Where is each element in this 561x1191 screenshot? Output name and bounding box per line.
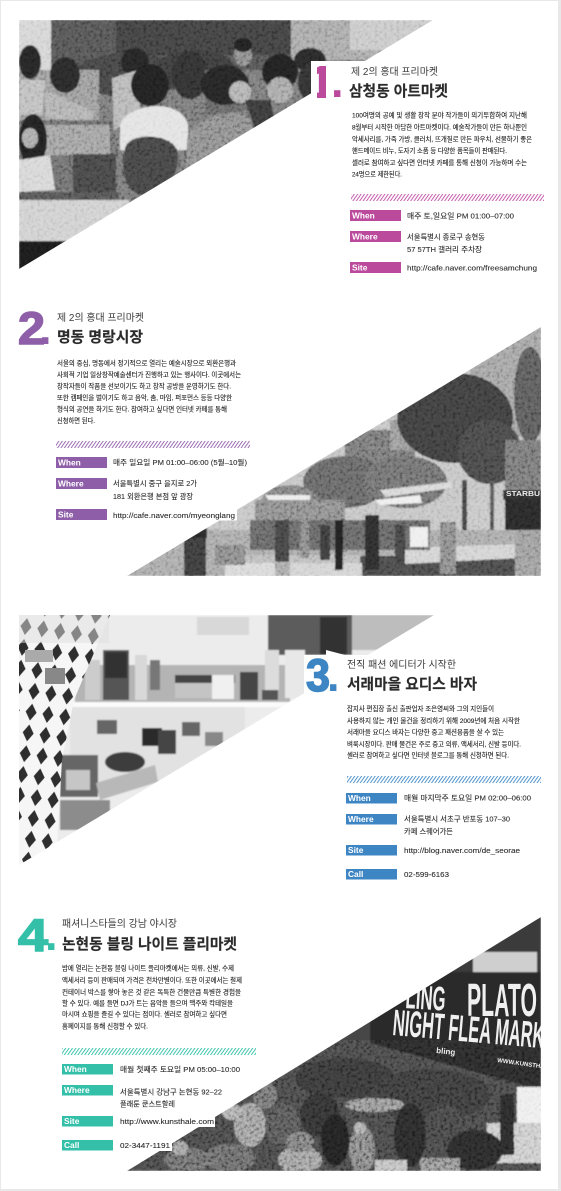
when bbox=[346, 792, 531, 804]
when bbox=[56, 457, 247, 468]
number 4: . bbox=[45, 909, 58, 960]
panel: section 3 Seorae village Yodis bazaar bbox=[19, 615, 541, 880]
description bbox=[352, 110, 532, 178]
subtitle: 패셔니스타들의 강남 야시장 bbox=[62, 918, 177, 930]
site: Site bbox=[348, 845, 364, 855]
number 3: 3 bbox=[306, 650, 330, 701]
call: Call bbox=[348, 869, 363, 879]
description: 셀러로 참여하고 싶다면 인터넷 블로그를 통해 신청하면 된다. bbox=[347, 750, 509, 760]
number 4: 4 bbox=[18, 910, 48, 961]
when: 매주 토,일요일 PM 01:00–07:00 bbox=[407, 212, 514, 220]
hatch divider bbox=[347, 776, 541, 783]
white header patch bbox=[311, 61, 436, 101]
panel: section 4 Nonhyeon-dong Bling night flea market bbox=[18, 909, 552, 1174]
subtitle: 제 2의 홍대 프리마켓 bbox=[57, 311, 144, 324]
info table bbox=[56, 457, 247, 520]
number 1 bbox=[317, 66, 340, 98]
info table bbox=[350, 210, 537, 273]
description: 마시며 쇼핑을 즐길 수 있다는 점이다. 셀러로 참여하고 싶다면 bbox=[62, 1009, 227, 1018]
banner lettering: WWW.KUNSTHALE bbox=[497, 1058, 552, 1072]
where: 서울특별시 강남구 논현동 92–22 bbox=[120, 1086, 222, 1096]
description: 8월부터 시작한 아담한 아트마켓이다. 예술작가들이 만든 하나뿐인 bbox=[352, 122, 527, 132]
when bbox=[350, 210, 514, 221]
site bbox=[56, 509, 237, 520]
description bbox=[57, 359, 241, 425]
when: When bbox=[58, 458, 81, 468]
description: 사회적 기업 일상창작예술센터가 진행하고 있는 행사이다. 이곳에서는 bbox=[57, 370, 241, 379]
description: 24명으로 제한된다. bbox=[352, 170, 402, 178]
site: http://cafe.naver.com/freesamchung bbox=[407, 264, 537, 272]
title: 삼청동 아트마켓 bbox=[349, 83, 448, 100]
when: 매월 마지막주 토요일 PM 02:00–06:00 bbox=[404, 792, 531, 802]
where: Where bbox=[348, 814, 374, 824]
where bbox=[56, 478, 197, 501]
site: http://www.kunsthale.com bbox=[120, 1117, 214, 1126]
site: Site bbox=[64, 1116, 80, 1126]
call bbox=[346, 869, 449, 880]
where: Where bbox=[352, 232, 378, 242]
photo: night flea market crowd under banner bbox=[127, 917, 552, 1174]
number 2: . bbox=[39, 303, 52, 354]
title: 서래마을 요디스 바자 bbox=[347, 676, 477, 693]
hatch divider bbox=[56, 441, 250, 448]
description: 할 수 있다. 예를 들면 DJ가 트는 음악을 들으며 맥주와 칵테일을 bbox=[62, 998, 233, 1007]
where bbox=[350, 231, 485, 254]
site: http://blog.naver.com/de_seorae bbox=[404, 846, 520, 855]
subtitle: 전직 패션 에디터가 시작한 bbox=[347, 659, 456, 671]
description: 서래마을 요디스 바자는 다양한 중고 패션용품을 살 수 있는 bbox=[347, 728, 504, 736]
description: 사용하지 않는 개인 물건을 정리하기 위해 2009년에 처음 시작한 bbox=[347, 716, 520, 725]
site bbox=[350, 262, 537, 273]
number 1: 1 bbox=[306, 57, 339, 108]
call: 02-599-6163 bbox=[404, 870, 449, 879]
description: 악세사리를, 가죽 가방, 클러치, 뜨개질로 만든 파우치, 선물하기 좋은 bbox=[352, 134, 532, 144]
where: 플래툰 쿤스트할레 bbox=[120, 1100, 175, 1108]
where: 카페 스퀘어가든 bbox=[404, 826, 453, 836]
description: 또한 캠페인을 벌이기도 하고 음악, 춤, 마임, 퍼포먼스 등등 다양한 bbox=[57, 393, 232, 402]
number 1: . bbox=[331, 56, 344, 107]
banner lettering bbox=[393, 984, 541, 1068]
description: 신청하면 된다. bbox=[57, 416, 95, 425]
photo: plaza with trees bbox=[127, 327, 546, 576]
info table bbox=[346, 792, 531, 880]
site bbox=[62, 1116, 215, 1127]
description: 셀러로 참여하고 싶다면 인터넷 카페를 통해 신청이 가능하며 수는 bbox=[352, 158, 527, 167]
call bbox=[62, 1140, 172, 1151]
call: 02-3447-1191 bbox=[120, 1141, 170, 1150]
title: 논현동 블링 나이트 플리마켓 bbox=[62, 936, 237, 953]
site bbox=[346, 845, 520, 856]
description: 액세서리 등이 판매되며 가격은 천차만별이다. 또한 이곳에서는 철제 bbox=[62, 975, 242, 984]
where bbox=[346, 814, 510, 836]
panel: section 1 Samcheong-dong art market bbox=[19, 20, 544, 273]
description: 핸드메이드 비누, 도자기 소품 등 다양한 품목들이 판매된다. bbox=[352, 146, 507, 155]
where: 서울특별시 중구 을지로 2가 bbox=[113, 478, 197, 488]
description bbox=[347, 704, 521, 760]
white header patch bbox=[304, 650, 437, 700]
hatch divider bbox=[62, 1048, 256, 1055]
description: 100여명의 공예 및 생활 창작 분야 작가들이 의기투합하여 지난해 bbox=[352, 110, 527, 120]
number 4 bbox=[18, 909, 58, 961]
where: Where bbox=[64, 1085, 90, 1095]
description: 컨테이너 박스를 쌓아 놓은 것 같은 독특한 건물만큼 특별한 경험을 bbox=[62, 987, 241, 996]
call: Call bbox=[64, 1140, 79, 1150]
where: 서울특별시 서초구 반포동 107–30 bbox=[404, 814, 510, 824]
description bbox=[62, 963, 242, 1030]
description: 서울의 중심, 명동에서 정기적으로 열리는 예술시장으로 외환은행과 bbox=[57, 359, 236, 368]
when: 매주 일요일 PM 01:00–06:00 (5월–10월) bbox=[113, 457, 247, 467]
storefront sign: STARBU bbox=[506, 489, 540, 498]
where: 181 외환은행 본점 앞 광장 bbox=[113, 491, 193, 501]
subtitle: 제 2의 홍대 프리마켓 bbox=[351, 65, 438, 78]
number 3: . bbox=[327, 650, 340, 701]
banner lettering: LING bbox=[404, 978, 447, 1019]
when: When bbox=[348, 793, 371, 803]
where: Where bbox=[58, 478, 84, 488]
when bbox=[62, 1064, 240, 1074]
when: When bbox=[64, 1064, 87, 1074]
where bbox=[62, 1085, 222, 1108]
photo: shelves with vintage goods bbox=[19, 615, 434, 865]
photo: art market crowd bbox=[19, 20, 433, 271]
description: 홈페이지를 통해 신청할 수 있다. bbox=[62, 1021, 148, 1030]
info table bbox=[62, 1064, 240, 1151]
number 2: 2 bbox=[18, 303, 45, 354]
where: 서울특별시 종로구 송현동 bbox=[407, 232, 485, 242]
banner lettering: bling bbox=[436, 1046, 456, 1057]
description: 잡지사 편집장 출신 출판업자 조은영씨와 그의 지인들이 bbox=[347, 704, 494, 713]
description: 벼룩시장이다. 판매 물건은 주로 중고 의류, 액세서리, 신발 등이다. bbox=[347, 739, 521, 748]
where: 57 57TH 갤러리 주차장 bbox=[407, 244, 482, 254]
hatch divider bbox=[351, 194, 544, 201]
panel: section 2 Myeongdong market bbox=[18, 303, 546, 576]
site: Site bbox=[58, 510, 74, 520]
description: 형식의 공연을 하기도 한다. 참여하고 싶다면 인터넷 카페를 통해 bbox=[57, 404, 227, 413]
title: 명동 명랑시장 bbox=[57, 329, 143, 346]
site: http://cafe.naver.com/myeonglang bbox=[113, 511, 235, 520]
site: Site bbox=[352, 262, 368, 272]
description: 창작자들이 작품을 선보이기도 하고 창작 공방을 운영하기도 한다. bbox=[57, 382, 231, 390]
when: When bbox=[352, 210, 375, 220]
when: 매월 첫째주 토요일 PM 05:00–10:00 bbox=[120, 1064, 240, 1074]
description: 밤에 열리는 논현동 블링 나이트 플리마켓에서는 의류, 신발, 수제 bbox=[62, 963, 234, 972]
